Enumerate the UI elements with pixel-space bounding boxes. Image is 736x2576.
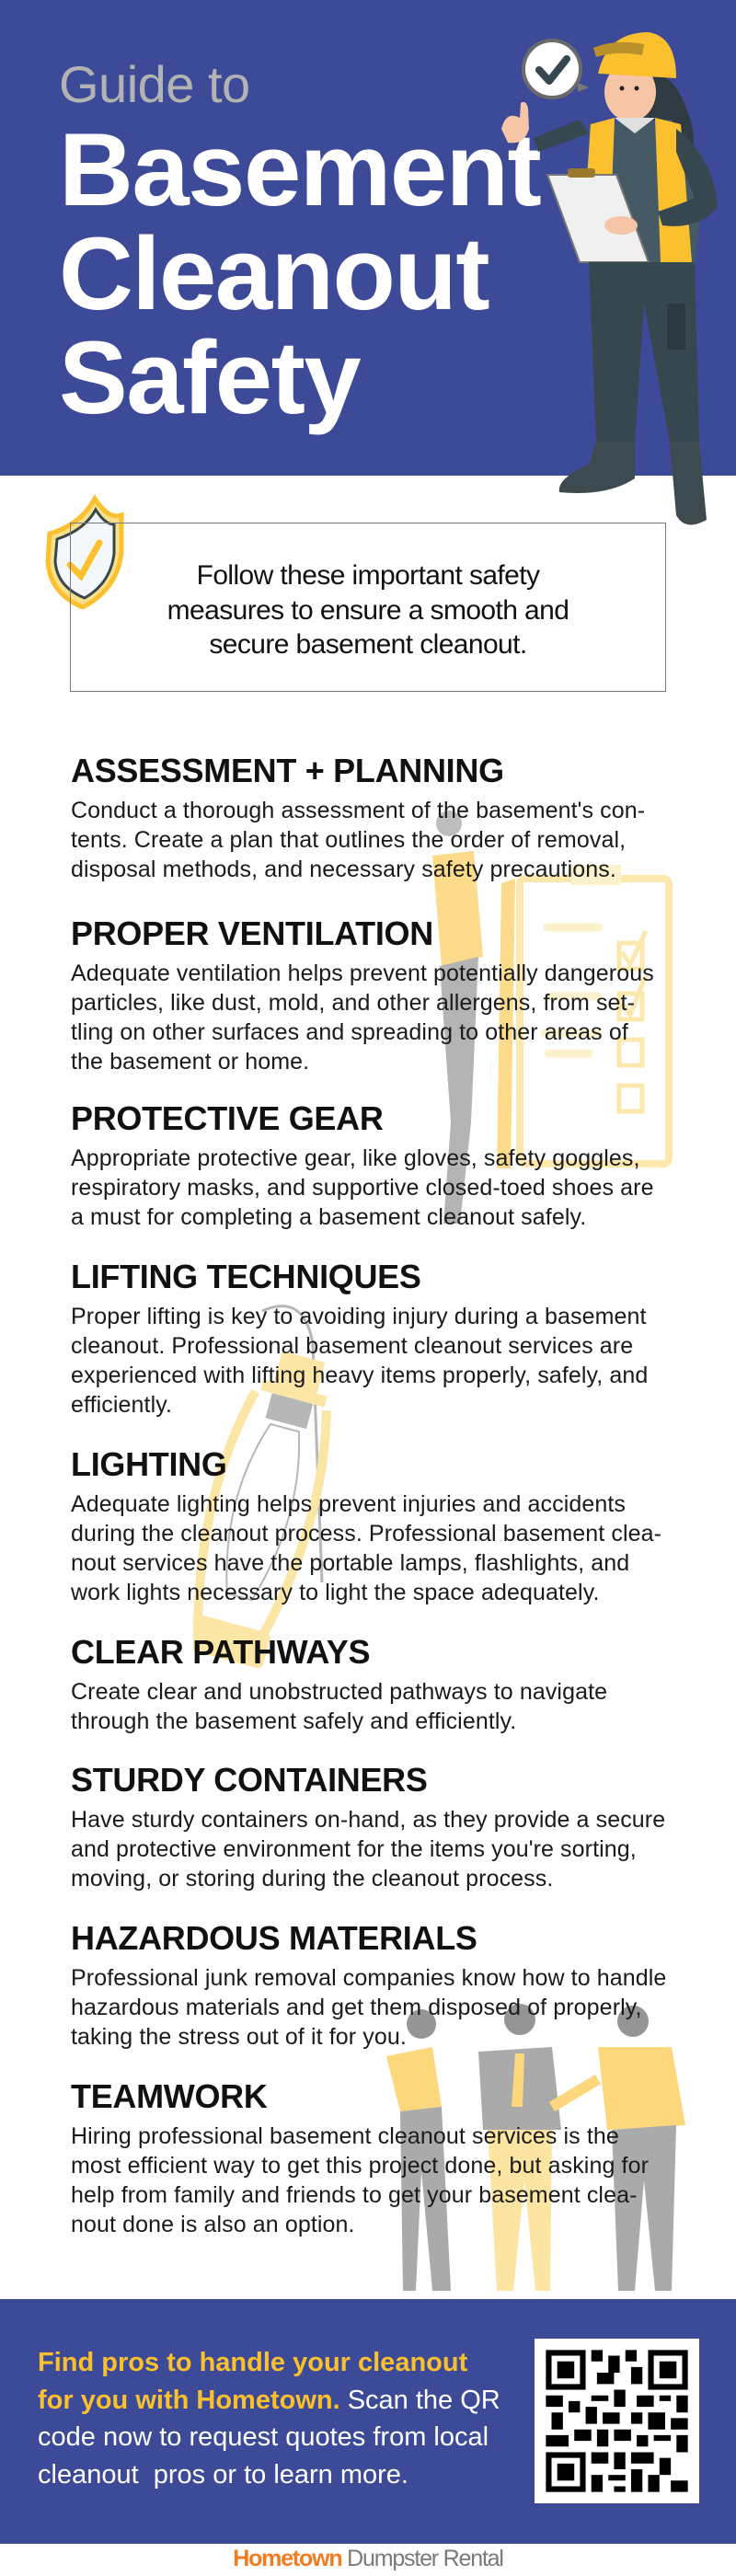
section: protective gear: Appropriate protective gear, like gloves, safety goggles, <box>71 1145 640 1171</box>
section: proper ventilation: tling on other surfaces and spreading to other areas of <box>71 1019 628 1045</box>
section: hazardous materials <box>71 1919 666 2050</box>
section: clear pathways: CLEAR PATHWAYS <box>71 1633 370 1671</box>
section: proper ventilation: Adequate ventilation helps prevent potentially dangerous <box>71 960 654 986</box>
header band <box>0 0 736 476</box>
section: lifting techniques: Proper lifting is key to avoiding injury during a basement <box>71 1304 647 1329</box>
icon: shield <box>46 494 123 609</box>
title: Guide to <box>59 55 250 113</box>
section: clear pathways: through the basement safely and efficiently. <box>71 1708 516 1734</box>
section: lifting techniques: cleanout. Professional basement cleanout services are <box>71 1333 633 1359</box>
section: lighting: work lights necessary to light the space adequately. <box>71 1580 600 1605</box>
section: assessment + planning: tents. Create a plan that outlines the order of removal, <box>71 827 626 853</box>
section: clear pathways <box>71 1633 607 1734</box>
intro box: secure basement cleanout. <box>209 629 527 660</box>
section: assessment + planning: Conduct a thorough assessment of the basement's con- <box>71 798 645 823</box>
illustration: worker with clipboard <box>501 32 718 524</box>
section: lighting: nout services have the portable lamps, flashlights, and <box>71 1550 629 1576</box>
intro box <box>70 523 666 692</box>
section: sturdy containers: and protective environment for the items you're sorting, <box>71 1836 637 1862</box>
qr code <box>535 2339 699 2503</box>
section: sturdy containers: moving, or storing during the cleanout process. <box>71 1866 553 1892</box>
section: teamwork: TEAMWORK <box>71 2077 268 2115</box>
section: proper ventilation <box>71 914 654 1075</box>
background illustration: lantern <box>193 1305 331 1669</box>
section: lifting techniques: experienced with lifting heavy items properly, safely, and <box>71 1363 648 1388</box>
section: lifting techniques <box>71 1258 648 1418</box>
section: teamwork: nout done is also an option. <box>71 2212 355 2237</box>
title <box>59 55 541 435</box>
section: teamwork: most efficient way to get this project done, but asking for <box>71 2153 649 2179</box>
section: sturdy containers <box>71 1761 665 1892</box>
intro box: Follow these important safety <box>197 560 539 591</box>
section: sturdy containers: STURDY CONTAINERS <box>71 1761 428 1799</box>
section: hazardous materials: Professional junk removal companies know how to handle <box>71 1965 666 1991</box>
section: proper ventilation: the basement or home. <box>71 1049 309 1075</box>
section: lifting techniques: LIFTING TECHNIQUES <box>71 1258 421 1295</box>
section: proper ventilation: PROPER VENTILATION <box>71 914 433 952</box>
section: lighting: LIGHTING <box>71 1445 227 1483</box>
cta text: code now to request quotes from local <box>38 2422 489 2452</box>
logo: Hometown Dumpster Rental: Hometown Dumpster Rental <box>233 2546 503 2571</box>
background illustration: person with checklist <box>432 811 673 1224</box>
section: hazardous materials: hazardous materials and get them disposed of properly, <box>71 1995 642 2020</box>
cta text: Find pros to handle your cleanout <box>38 2348 467 2377</box>
section: clear pathways: Create clear and unobstructed pathways to navigate <box>71 1679 607 1705</box>
icon: check bubble <box>523 40 589 98</box>
section: lighting: Adequate lighting helps prevent injuries and accidents <box>71 1491 626 1517</box>
section: lighting <box>71 1445 661 1605</box>
section: hazardous materials: HAZARDOUS MATERIALS <box>71 1919 477 1957</box>
intro box: measures to ensure a smooth and <box>167 594 569 626</box>
section: sturdy containers: Have sturdy containers on-hand, as they provide a secure <box>71 1807 665 1833</box>
background illustration: team of three <box>386 2004 685 2291</box>
section: lighting: during the cleanout process. Professional basement clea- <box>71 1521 661 1547</box>
section: hazardous materials: taking the stress out of it for you. <box>71 2024 407 2050</box>
section: teamwork: help from family and friends to get your basement clea- <box>71 2182 638 2208</box>
section: protective gear: PROTECTIVE GEAR <box>71 1099 384 1137</box>
section: protective gear: respiratory masks, and supportive closed-toed shoes are <box>71 1175 654 1201</box>
section: protective gear <box>71 1099 654 1230</box>
cta text: for you with Hometown. Scan the QR <box>38 2385 500 2414</box>
section: lifting techniques: efficiently. <box>71 1392 172 1418</box>
section: assessment + planning <box>71 752 645 882</box>
title: Basement <box>59 112 540 227</box>
cta text <box>38 2348 500 2490</box>
footer call to action <box>0 2299 736 2544</box>
title: Cleanout <box>59 216 489 331</box>
section: protective gear: a must for completing a basement cleanout safely. <box>71 1204 586 1230</box>
section: assessment + planning: disposal methods, and necessary safety precautions. <box>71 857 616 882</box>
section: teamwork: Hiring professional basement cleanout services is the <box>71 2123 619 2149</box>
section: proper ventilation: particles, like dust, mold, and other allergens, from set- <box>71 990 635 1016</box>
section: assessment + planning: ASSESSMENT + PLANNING <box>71 752 504 789</box>
title: Safety <box>59 320 360 435</box>
section: teamwork <box>71 2077 649 2237</box>
cta text: cleanout pros or to learn more. <box>38 2460 408 2490</box>
